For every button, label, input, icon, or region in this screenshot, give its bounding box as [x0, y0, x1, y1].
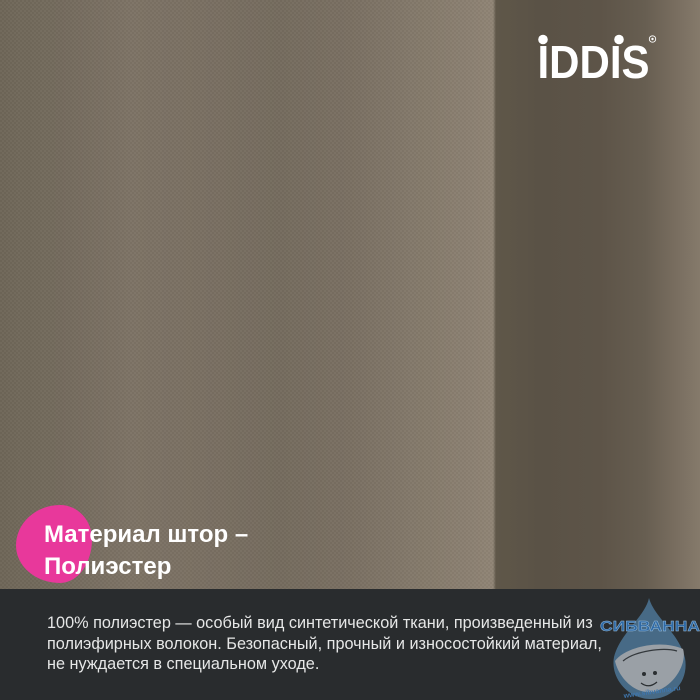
text block: description: полиэфирных волокон. Безопасный, прочный и износостойкий материал,	[47, 634, 602, 652]
watermark: СибВанна logo	[600, 598, 700, 700]
heading: Полиэстер	[44, 552, 171, 580]
watermark url: www.sibvanna.ru	[622, 685, 681, 700]
heading	[44, 521, 248, 580]
icon: water drop	[613, 598, 686, 699]
heading: Материал штор –	[44, 521, 248, 548]
text block: description	[47, 614, 602, 673]
panel: description bar	[0, 589, 700, 700]
icon: pink blob behind heading	[16, 505, 92, 583]
icon: bathtub face	[615, 645, 684, 692]
text block: description: 100% полиэстер — особый вид синтетической ткани, произведенный из	[47, 614, 593, 632]
watermark name: СИБВАННА	[600, 618, 700, 635]
text block: description: не нуждается в специальном уходе.	[47, 655, 319, 673]
